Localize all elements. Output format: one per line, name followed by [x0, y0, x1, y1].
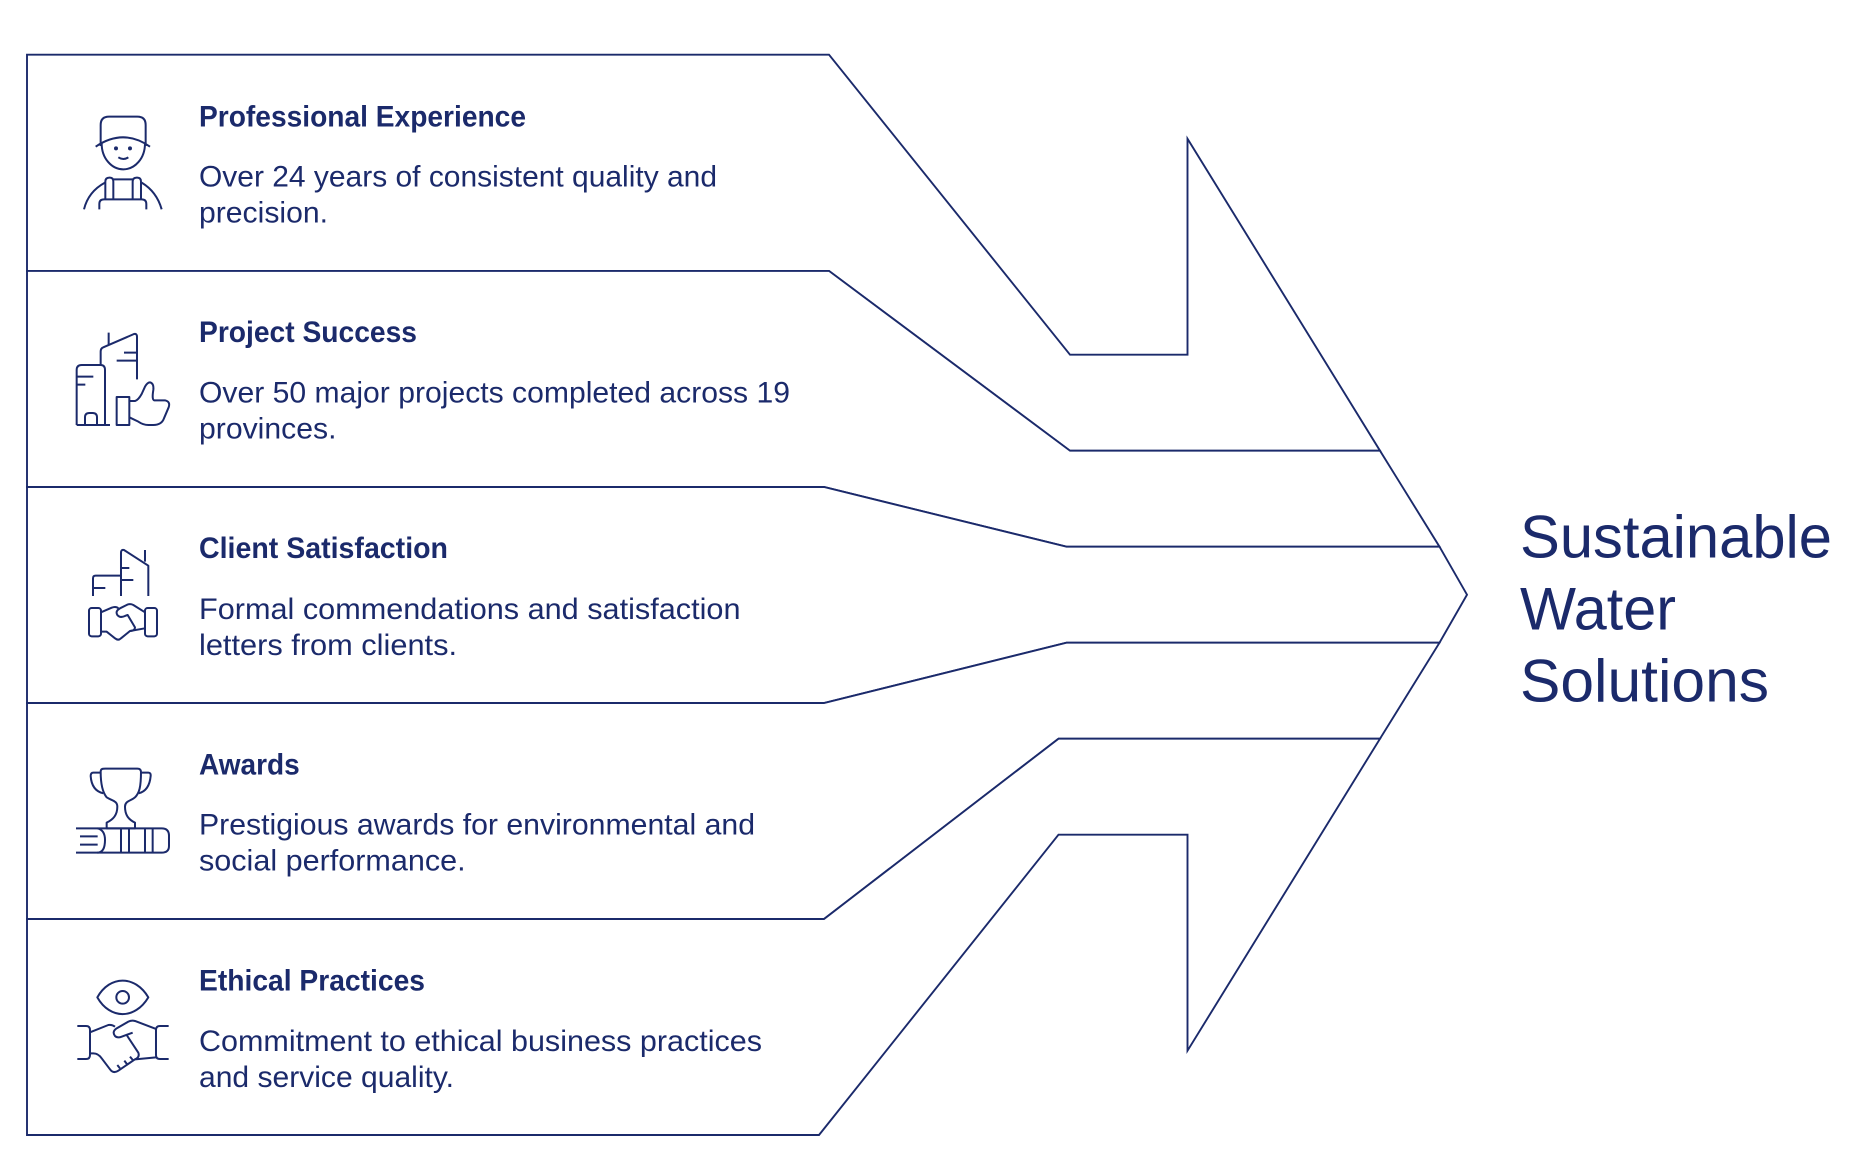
- title: sustainable water solutions: Solutions: [1520, 648, 1769, 714]
- text: project success description: Over 50 major projects completed across 19: [199, 376, 790, 409]
- text: awards description: social performance.: [199, 845, 466, 878]
- title: sustainable water solutions: [1520, 504, 1832, 714]
- icon: worker: [84, 117, 162, 209]
- text: client satisfaction description: Formal commendations and satisfaction: [199, 593, 740, 626]
- text: professional experience description: precision.: [199, 197, 328, 230]
- text: professional experience description: Over 24 years of consistent quality and: [199, 161, 717, 194]
- title: sustainable water solutions: Sustainable: [1520, 504, 1832, 570]
- text: client satisfaction description: letters from clients.: [199, 629, 457, 662]
- text: awards description: [199, 809, 755, 878]
- text: ethical practices description: [199, 1025, 762, 1094]
- panel: client satisfaction: [27, 487, 1467, 703]
- text: ethical practices description: and service quality.: [199, 1061, 454, 1094]
- heading: awards: Awards: [199, 748, 300, 781]
- heading: client satisfaction: Client Satisfaction: [199, 532, 448, 565]
- icon: buildings with thumbs up: [77, 333, 169, 425]
- panel: awards: [27, 643, 1440, 919]
- text: project success description: [199, 376, 790, 445]
- text: professional experience description: [199, 161, 717, 230]
- title: sustainable water solutions: Water: [1520, 576, 1676, 642]
- icon: eye with handshake: [77, 981, 169, 1072]
- heading: project success: Project Success: [199, 316, 417, 349]
- panel: ethical practices: [27, 739, 1380, 1135]
- text: ethical practices description: Commitment to ethical business practices: [199, 1025, 762, 1058]
- panel: professional experience: [27, 55, 1380, 451]
- text: project success description: provinces.: [199, 412, 336, 445]
- panel: project success: [27, 271, 1440, 547]
- text: client satisfaction description: [199, 593, 740, 662]
- heading: ethical practices: Ethical Practices: [199, 965, 425, 998]
- heading: professional experience: Professional Experience: [199, 101, 526, 134]
- icon: trophy on book: [76, 769, 169, 853]
- icon: buildings with handshake: [89, 550, 157, 640]
- text: awards description: Prestigious awards for environmental and: [199, 809, 755, 842]
